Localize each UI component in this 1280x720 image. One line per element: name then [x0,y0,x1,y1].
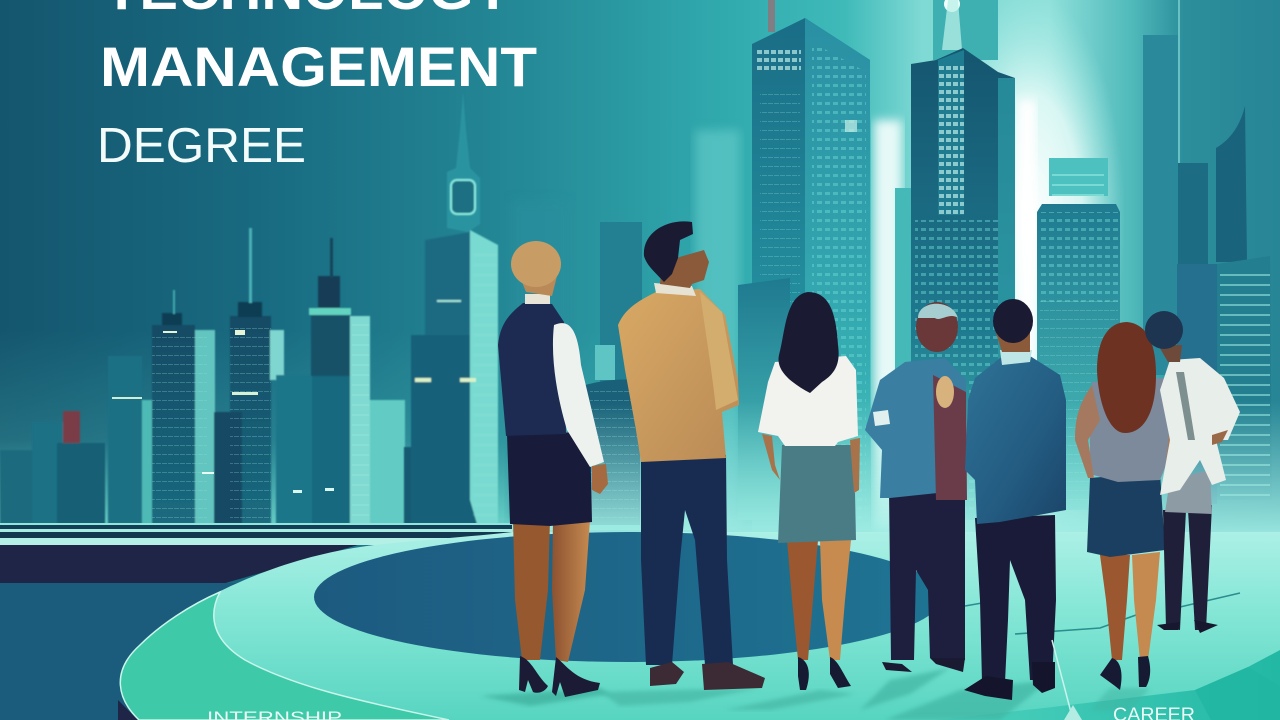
central tower with logo [404,92,498,524]
bottom right floor wedge [934,650,1280,720]
curved platform [120,532,1280,720]
left skyline [0,228,405,524]
dark ledge and lower block [0,545,358,720]
right tall tower [738,0,870,530]
right mid tower [1037,158,1120,510]
person 7: person in white coat [1145,311,1240,633]
person 3: woman in white blouse [725,292,860,710]
glow behind towers [874,0,1125,530]
person 6: woman with auburn hair [1075,322,1183,712]
left tower windows [112,320,369,523]
person 5: man in blue suit [885,299,1066,720]
platform back strips [0,523,512,545]
dark blue ellipse on floor [314,532,942,662]
person 2: man in tan jacket [600,221,765,706]
far right towers [1143,0,1272,504]
title: Technology Management: MANAGEMENT [100,35,537,98]
right ground haze [510,400,1280,540]
floor lines [965,593,1240,634]
person 1: woman in navy vest [480,241,610,706]
mid skyline [585,222,642,525]
right twin tower [895,0,1015,523]
floor pointer line [1052,640,1082,720]
person 4: man with maroon bag [860,302,967,710]
faded far skyline [510,130,740,530]
subtitle: Degree: DEGREE [97,119,306,173]
title: Technology Management [100,0,537,98]
icon: tower logo [451,180,475,214]
